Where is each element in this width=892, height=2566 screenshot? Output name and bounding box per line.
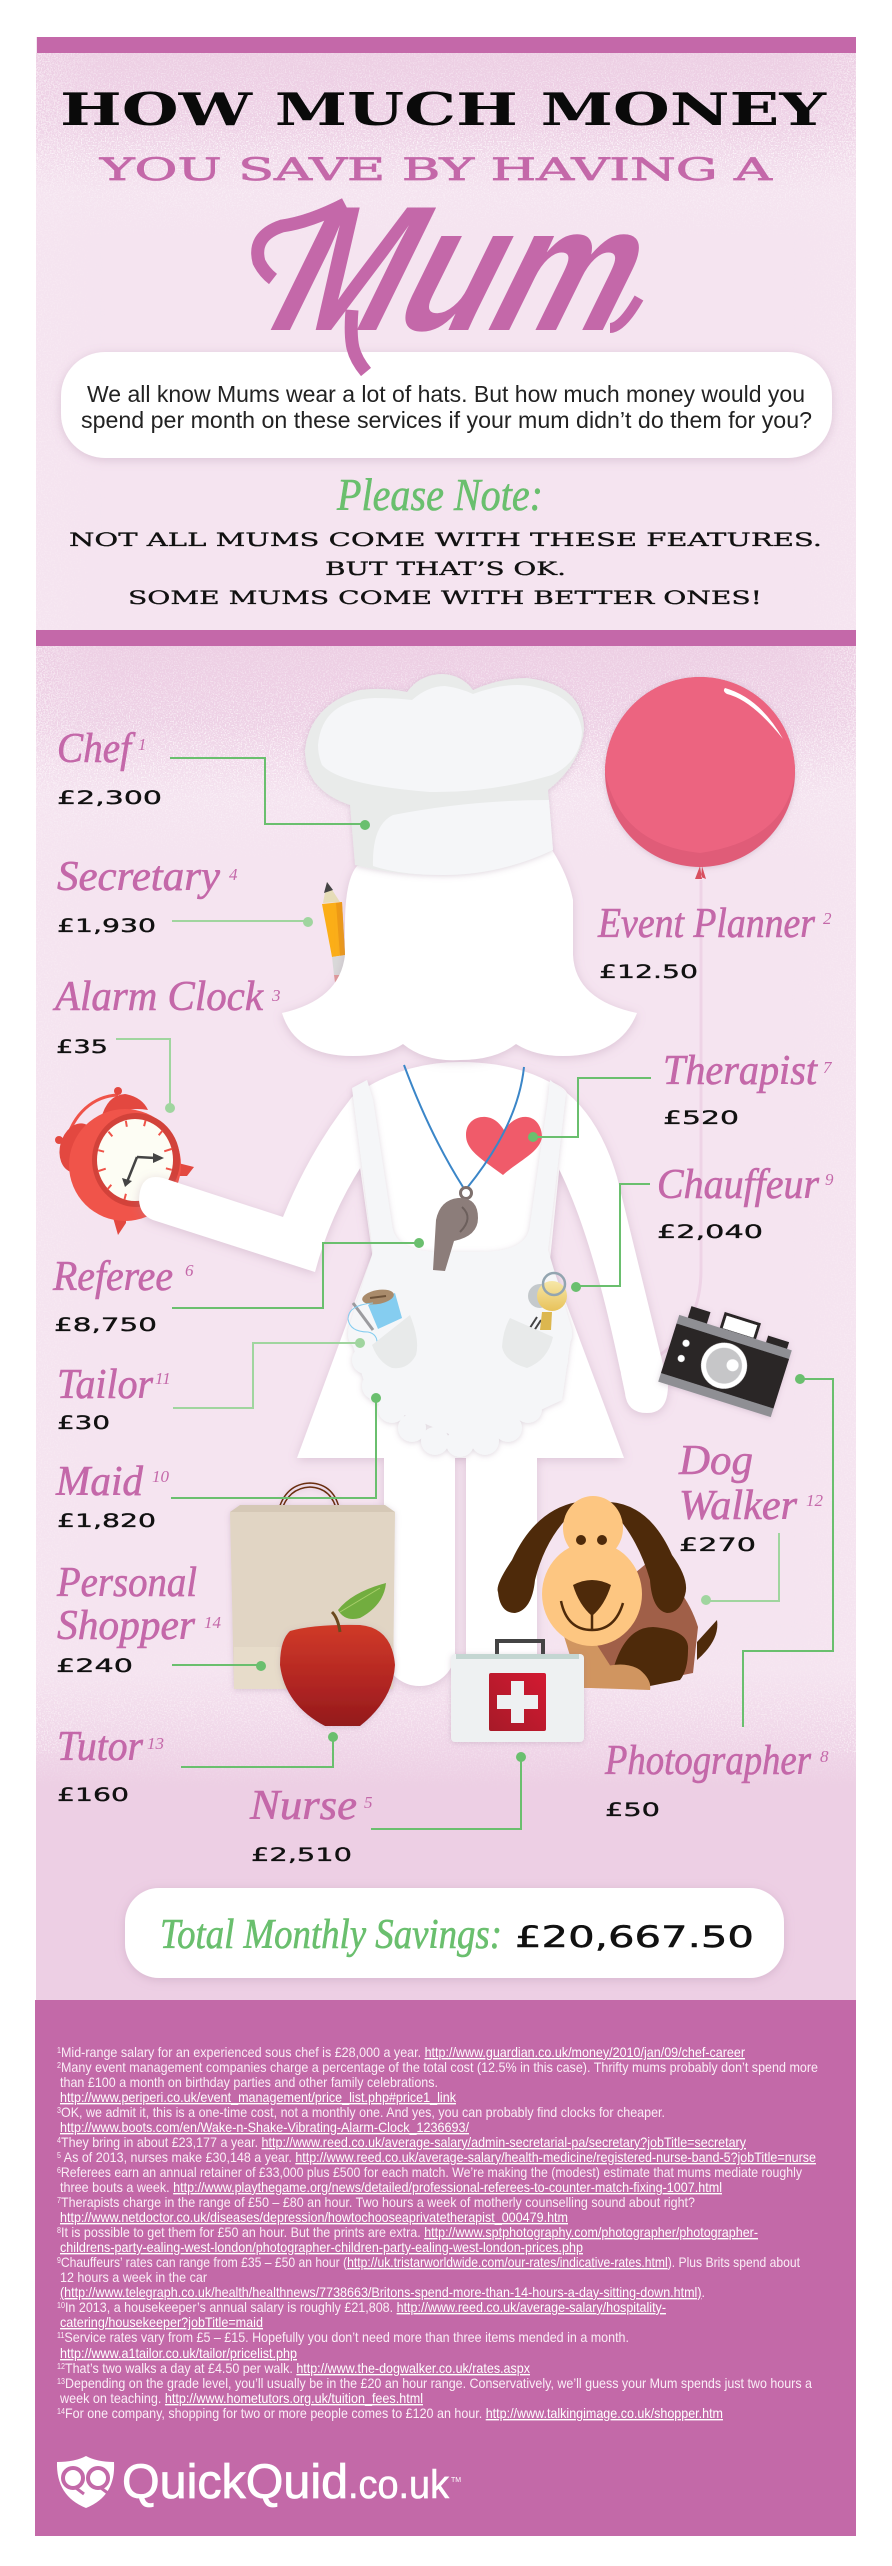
icon: pencil: [322, 882, 345, 990]
icon: whistle on lanyard: [404, 1065, 524, 1271]
footnotes: 3: [57, 2106, 61, 2115]
label: dog walker: [678, 1438, 824, 1556]
connector: referee: [172, 1238, 424, 1308]
label: dog walker: Dog: [678, 1438, 753, 1484]
label: chauffeur: [657, 1162, 834, 1243]
connector: nurse: [371, 1752, 526, 1829]
label: personal shopper: Personal: [56, 1560, 197, 1606]
footnotes: 2: [57, 2061, 61, 2070]
icon: alarm clock: [54, 1087, 194, 1235]
connector: dog walker: [701, 1533, 779, 1605]
footnotes: 9: [57, 2256, 61, 2265]
footnotes: http://www.guardian.co.uk/money/2010/jan/09/chef-career: [425, 2044, 745, 2060]
label: photographer: 8: [820, 1747, 829, 1766]
label: event planner: [597, 901, 832, 983]
label: maid: Maid: [55, 1459, 144, 1505]
label: dog walker: Walker: [679, 1483, 798, 1529]
label: tutor: Tutor: [57, 1724, 144, 1770]
title: how much money: HOW MUCH MONEY: [60, 83, 827, 136]
label: alarm clock: Alarm Clock: [52, 974, 264, 1020]
footnotes: Chauffeurs’ rates can range from £35 – £50 an hour (: [61, 2254, 347, 2270]
label: nurse: Nurse: [249, 1783, 357, 1829]
icon: dog: [498, 1496, 717, 1690]
connector: photographer: [743, 1374, 833, 1727]
label: photographer: [604, 1738, 829, 1821]
logo: QuickQuid: [57, 2456, 461, 2509]
label: referee: [52, 1254, 194, 1336]
panel: top header background: [36, 37, 856, 646]
intro bubble: spend per month on these services if your mum didn’t do them for you?: [81, 407, 812, 433]
footnotes: Mid-range salary for an experienced sous chef is £28,000 a year.: [61, 2044, 425, 2060]
intro bubble: [61, 352, 832, 458]
footnotes: than £100 a month on birthday parties and other family celebrations.: [60, 2074, 438, 2090]
icon: heart: [466, 1117, 542, 1175]
footnotes: http://www.netdoctor.co.uk/diseases/depression/howtochooseaprivatetherapist_000479.htm: [60, 2209, 568, 2225]
footnotes: childrens-party-ealing-west-london/photographer-children-party-ealing-west-london-prices.php: [60, 2239, 583, 2255]
label: event planner: £12.50: [599, 961, 698, 983]
footnotes: [57, 2044, 818, 2421]
footnotes: 6: [57, 2166, 61, 2175]
label: personal shopper: 14: [204, 1613, 222, 1632]
icon: balloon: [605, 677, 795, 1372]
footnotes: 14: [57, 2407, 65, 2416]
footnotes: week on teaching. http://www.hometutors.org.uk/tuition_fees.html: [59, 2390, 423, 2406]
label: therapist: [663, 1048, 833, 1129]
label: referee: 6: [185, 1261, 194, 1280]
connector: chef: [170, 758, 370, 830]
label: chauffeur: 9: [825, 1170, 834, 1189]
footnotes: catering/housekeeper?jobTitle=maid: [60, 2314, 263, 2330]
label: secretary: 4: [229, 865, 238, 884]
note text: [69, 529, 822, 609]
icon: shopping bag: [230, 1483, 395, 1689]
footnotes: 1: [57, 2046, 61, 2055]
connector: secretary: [172, 917, 313, 927]
footnotes: http://www.a1tailor.co.uk/tailor/pricelist.php: [60, 2345, 297, 2361]
connector: tailor: [173, 1338, 365, 1408]
total savings callout: [125, 1888, 784, 1978]
footnotes: Depending on the grade level, you’ll usually be in the £20 an hour range. Conservatively, we’ll guess your Mum spends just two hours a: [65, 2375, 812, 2391]
label: alarm clock: [52, 974, 280, 1058]
label: alarm clock: 3: [271, 986, 280, 1005]
footnotes: Service rates vary from £5 – £15. Hopefully you don’t need more than three items mended in a month.: [64, 2329, 629, 2345]
label: chauffeur: Chauffeur: [657, 1162, 820, 1208]
icon: apple: [280, 1583, 395, 1726]
footnotes: 12 hours a week in the car: [60, 2269, 207, 2285]
label: secretary: Secretary: [57, 854, 220, 900]
footnotes: Referees earn an annual retainer of £33,000 plus £500 for each match. We’re making the (modest) estimate that mums mediate roughly: [61, 2164, 802, 2180]
label: alarm clock: £35: [56, 1036, 108, 1058]
label: referee: £8,750: [54, 1314, 157, 1336]
footnotes: In 2013, a housekeeper’s annual salary is roughly £21,808.: [65, 2299, 397, 2315]
footnotes: three bouts a week. http://www.playthegame.org/news/detailed/professional-referees-to-counter-match-fixing-1007.html: [60, 2179, 722, 2195]
footnotes: 8: [57, 2226, 61, 2235]
icon: camera: [658, 1301, 796, 1417]
connector: chauffeur: [571, 1184, 650, 1292]
label: maid: £1,820: [57, 1510, 156, 1532]
panel: footer: [35, 2000, 856, 2536]
label: personal shopper: £240: [56, 1655, 133, 1677]
connector: maid: [171, 1393, 381, 1498]
footnotes: http://www.sptphotography.com/photographer/photographer-: [424, 2224, 758, 2240]
footnotes: http://www.reed.co.uk/average-salary/hospitality-: [397, 2299, 666, 2315]
footnotes: http://www.reed.co.uk/average-salary/health-medicine/registered-nurse-band-5?jobTitle=nurse: [295, 2149, 816, 2165]
footnotes: For one company, shopping for two or more people comes to £120 an hour.: [65, 2405, 486, 2421]
label: nurse: 5: [364, 1793, 372, 1812]
label: referee: Referee: [52, 1254, 173, 1300]
label: maid: 10: [152, 1467, 170, 1486]
note text: NOT ALL MUMS COME WITH THESE FEATURES.: [69, 529, 822, 551]
label: photographer: Photographer: [604, 1738, 812, 1784]
icon: keys: [526, 1273, 567, 1337]
footnotes: 10: [57, 2301, 65, 2310]
connector: alarm clock: [116, 1039, 175, 1113]
label: chauffeur: £2,040: [657, 1221, 763, 1243]
label: tutor: [57, 1724, 164, 1806]
total savings callout: Total Monthly Savings:: [160, 1912, 502, 1958]
label: tailor: £30: [57, 1412, 110, 1434]
pockets: [372, 1315, 553, 1368]
icon: first aid kit: [451, 1641, 584, 1742]
label: tutor: £160: [57, 1784, 129, 1806]
label: maid: [55, 1459, 170, 1532]
label: photographer: £50: [605, 1799, 660, 1821]
figure: hair: [282, 850, 637, 1060]
footnotes: 7: [57, 2196, 61, 2205]
label: therapist: 7: [823, 1058, 833, 1077]
panel: character section background: [36, 53, 856, 2000]
script title: Mum: Mum: [256, 169, 672, 368]
footnotes: 4: [57, 2136, 61, 2145]
footnotes: http://uk.tristarworldwide.com/our-rates/indicative-rates.html). Plus Brits spend about: [347, 2254, 820, 2270]
label: nurse: [249, 1783, 372, 1866]
footnotes: Therapists charge in the range of £50 – £80 an hour. Two hours a week of motherly counselling sound about right?: [61, 2194, 695, 2210]
label: secretary: [57, 854, 238, 937]
figure: torso and arms: [139, 1062, 668, 1413]
label: secretary: £1,930: [57, 915, 156, 937]
subtitle: you save by having a: YOU SAVE BY HAVING A: [98, 152, 773, 188]
label: chef: £2,300: [57, 787, 162, 809]
label: tailor: 11: [155, 1369, 171, 1388]
label: tailor: [57, 1362, 171, 1434]
icon: chef hat: [305, 674, 584, 875]
footnotes: That’s two walks a day at £4.50 per walk.: [65, 2360, 296, 2376]
footnotes: (http://www.telegraph.co.uk/health/healthnews/7738663/Britons-spend-more-than-14-hours-a-day-sitting-down.html).: [60, 2284, 705, 2300]
connector: therapist: [528, 1078, 651, 1142]
footnotes: Many event management companies charge a percentage of the total cost (12.5% in this case). Thrifty mums probably don’t spend more: [61, 2059, 818, 2075]
footnotes: 11: [57, 2331, 65, 2340]
label: personal shopper: [56, 1560, 222, 1677]
connector: personal shopper: [172, 1661, 266, 1671]
footnotes: http://www.periperi.co.uk/event_management/price_list.php#price1_link: [60, 2089, 457, 2105]
intro bubble: We all know Mums wear a lot of hats. But how much money would you: [87, 381, 805, 407]
footnotes: As of 2013, nurses make £30,148 a year.: [61, 2149, 295, 2165]
label: chef: [57, 726, 162, 809]
label: event planner: 2: [823, 909, 832, 928]
logo: QuickQuid: .co.uk: [348, 2463, 450, 2507]
note text: SOME MUMS COME WITH BETTER ONES!: [128, 587, 762, 609]
label: nurse: £2,510: [251, 1844, 352, 1866]
label: personal shopper: Shopper: [57, 1603, 196, 1649]
footnotes: 5: [57, 2151, 61, 2160]
label: therapist: Therapist: [663, 1048, 818, 1094]
label: event planner: Event Planner: [597, 901, 816, 947]
icon: thread spool and needle: [348, 1287, 402, 1345]
label: therapist: £520: [663, 1107, 739, 1129]
footnotes: http://www.boots.com/en/Wake-n-Shake-Vibrating-Alarm-Clock_1236693/: [60, 2119, 469, 2135]
top bar: [37, 37, 856, 53]
figure: apron: [348, 1080, 572, 1457]
footnotes: 12: [57, 2362, 65, 2371]
footnotes: http://www.the-dogwalker.co.uk/rates.aspx: [296, 2360, 530, 2376]
total savings callout: £20,667.50: [515, 1920, 754, 1954]
footnotes: It is possible to get them for £50 an hour. But the prints are extra.: [61, 2224, 424, 2240]
please note heading: Please Note:: [336, 469, 543, 520]
section divider bar: [36, 630, 856, 646]
note text: BUT THAT’S OK.: [325, 558, 566, 580]
label: dog walker: £270: [679, 1534, 756, 1556]
footnotes: 13: [57, 2377, 65, 2386]
label: chef: 1: [138, 735, 146, 754]
logo: QuickQuid: TM: [451, 2477, 461, 2484]
footnotes: http://www.reed.co.uk/average-salary/admin-secretarial-pa/secretary?jobTitle=secretary: [262, 2134, 746, 2150]
label: tutor: 13: [147, 1734, 164, 1753]
label: chef: Chef: [57, 726, 136, 772]
footnotes: OK, we admit it, this is a one-time cost, not a monthly one. And yes, you can probably find clocks for cheaper.: [61, 2104, 665, 2120]
connector: tutor: [181, 1732, 338, 1767]
figure: legs and dress: [297, 1252, 624, 1686]
label: dog walker: 12: [806, 1491, 824, 1510]
footnotes: http://www.talkingimage.co.uk/shopper.htm: [486, 2405, 723, 2421]
logo: QuickQuid: QuickQuid: [122, 2456, 348, 2509]
label: tailor: Tailor: [57, 1362, 154, 1408]
footnotes: They bring in about £23,177 a year.: [61, 2134, 262, 2150]
